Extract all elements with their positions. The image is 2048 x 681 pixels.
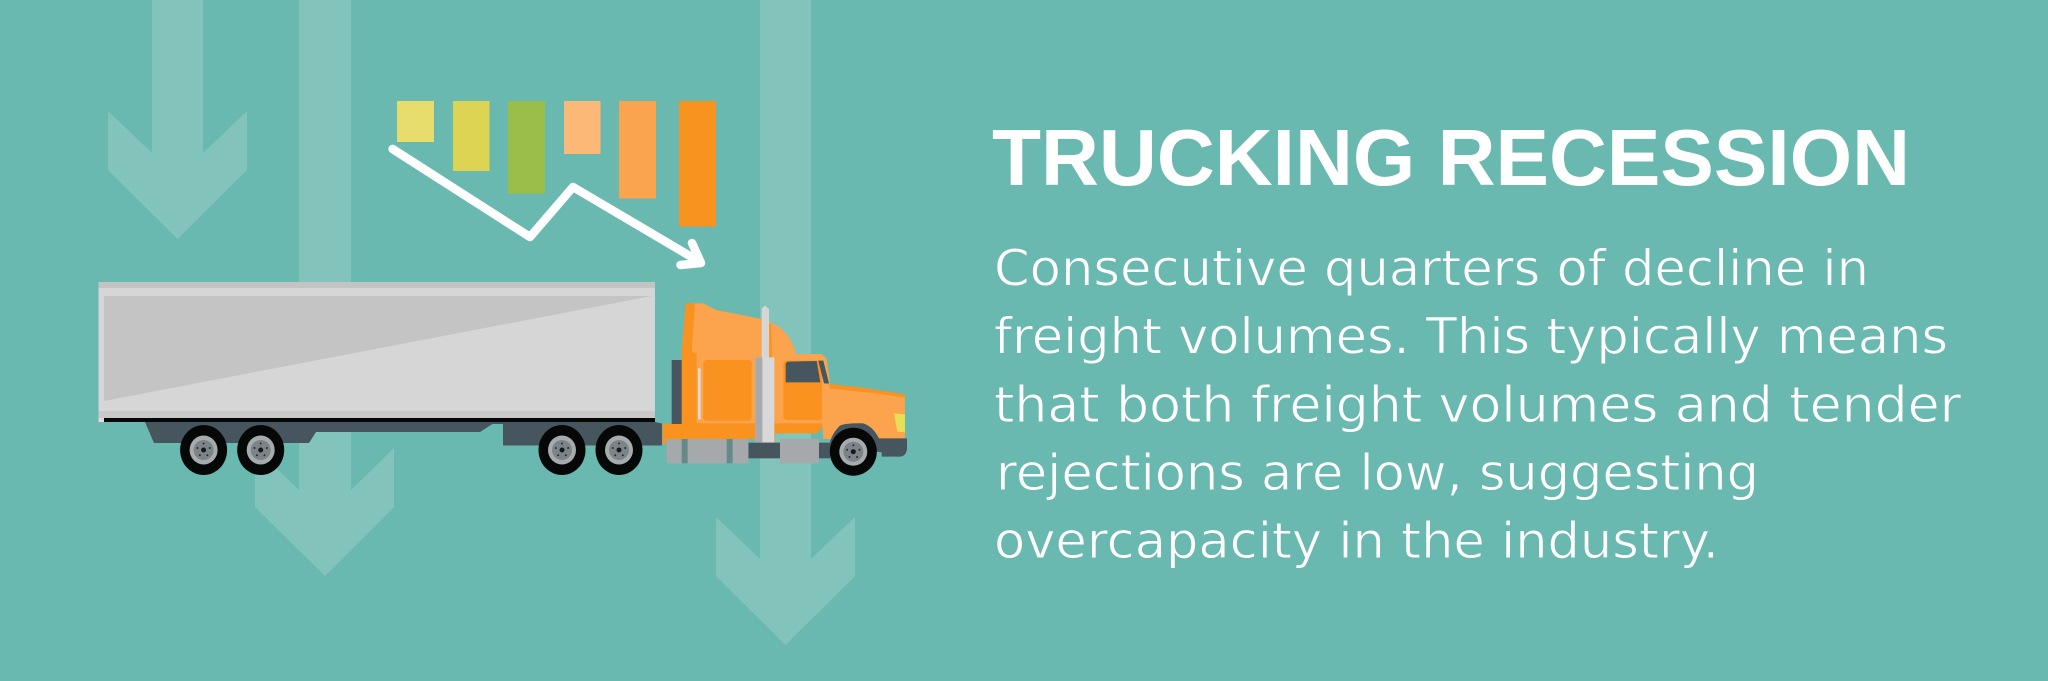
icon: background down arrow left xyxy=(108,0,247,239)
fairing seam xyxy=(769,323,772,358)
exhaust shroud xyxy=(755,357,774,442)
fuel tank xyxy=(667,439,748,463)
hood top accent xyxy=(829,384,905,398)
windshield xyxy=(818,361,829,383)
text block: definition xyxy=(994,240,1961,570)
sleeper door xyxy=(703,360,752,421)
hood xyxy=(822,383,905,439)
text block: definition: rejections are low, suggesting xyxy=(996,444,1759,502)
wheel xyxy=(180,425,227,475)
lower chassis xyxy=(748,443,830,458)
step box xyxy=(780,439,819,463)
exhaust shroud shade xyxy=(755,357,762,442)
headlight xyxy=(894,413,905,432)
truck illustration xyxy=(98,282,907,476)
title: TRUCKING RECESSION xyxy=(992,113,1910,202)
exhaust stack xyxy=(762,306,769,358)
trailer xyxy=(98,282,655,422)
text block: definition: overcapacity in the industry. xyxy=(994,512,1719,570)
roof fairing and cab side xyxy=(692,303,830,425)
sleeper handle xyxy=(698,368,701,419)
fender xyxy=(828,423,880,452)
bar chart: declining coloured bars xyxy=(397,101,716,226)
tractor cab xyxy=(663,303,907,463)
text block: definition: Consecutive quarters of decline in xyxy=(994,240,1869,298)
rear cab panel xyxy=(672,360,682,425)
arrow: white falling trend line xyxy=(393,149,701,265)
text block: definition: freight volumes. This typically means xyxy=(994,308,1948,366)
bumper xyxy=(877,438,907,457)
wheel xyxy=(596,425,642,475)
cab window xyxy=(786,361,820,382)
wheel xyxy=(830,428,877,476)
tank strap xyxy=(682,439,688,463)
icon: background down arrow right xyxy=(716,0,855,645)
wheel xyxy=(237,425,284,475)
wheel xyxy=(538,425,586,475)
cab door xyxy=(783,361,822,420)
trailer chassis xyxy=(145,422,662,446)
fairing rear strip and frame rail xyxy=(663,303,822,444)
text block: definition: that both freight volumes and tender xyxy=(994,376,1961,434)
tank strap xyxy=(727,439,733,463)
icon: background down arrow centre xyxy=(255,0,394,576)
